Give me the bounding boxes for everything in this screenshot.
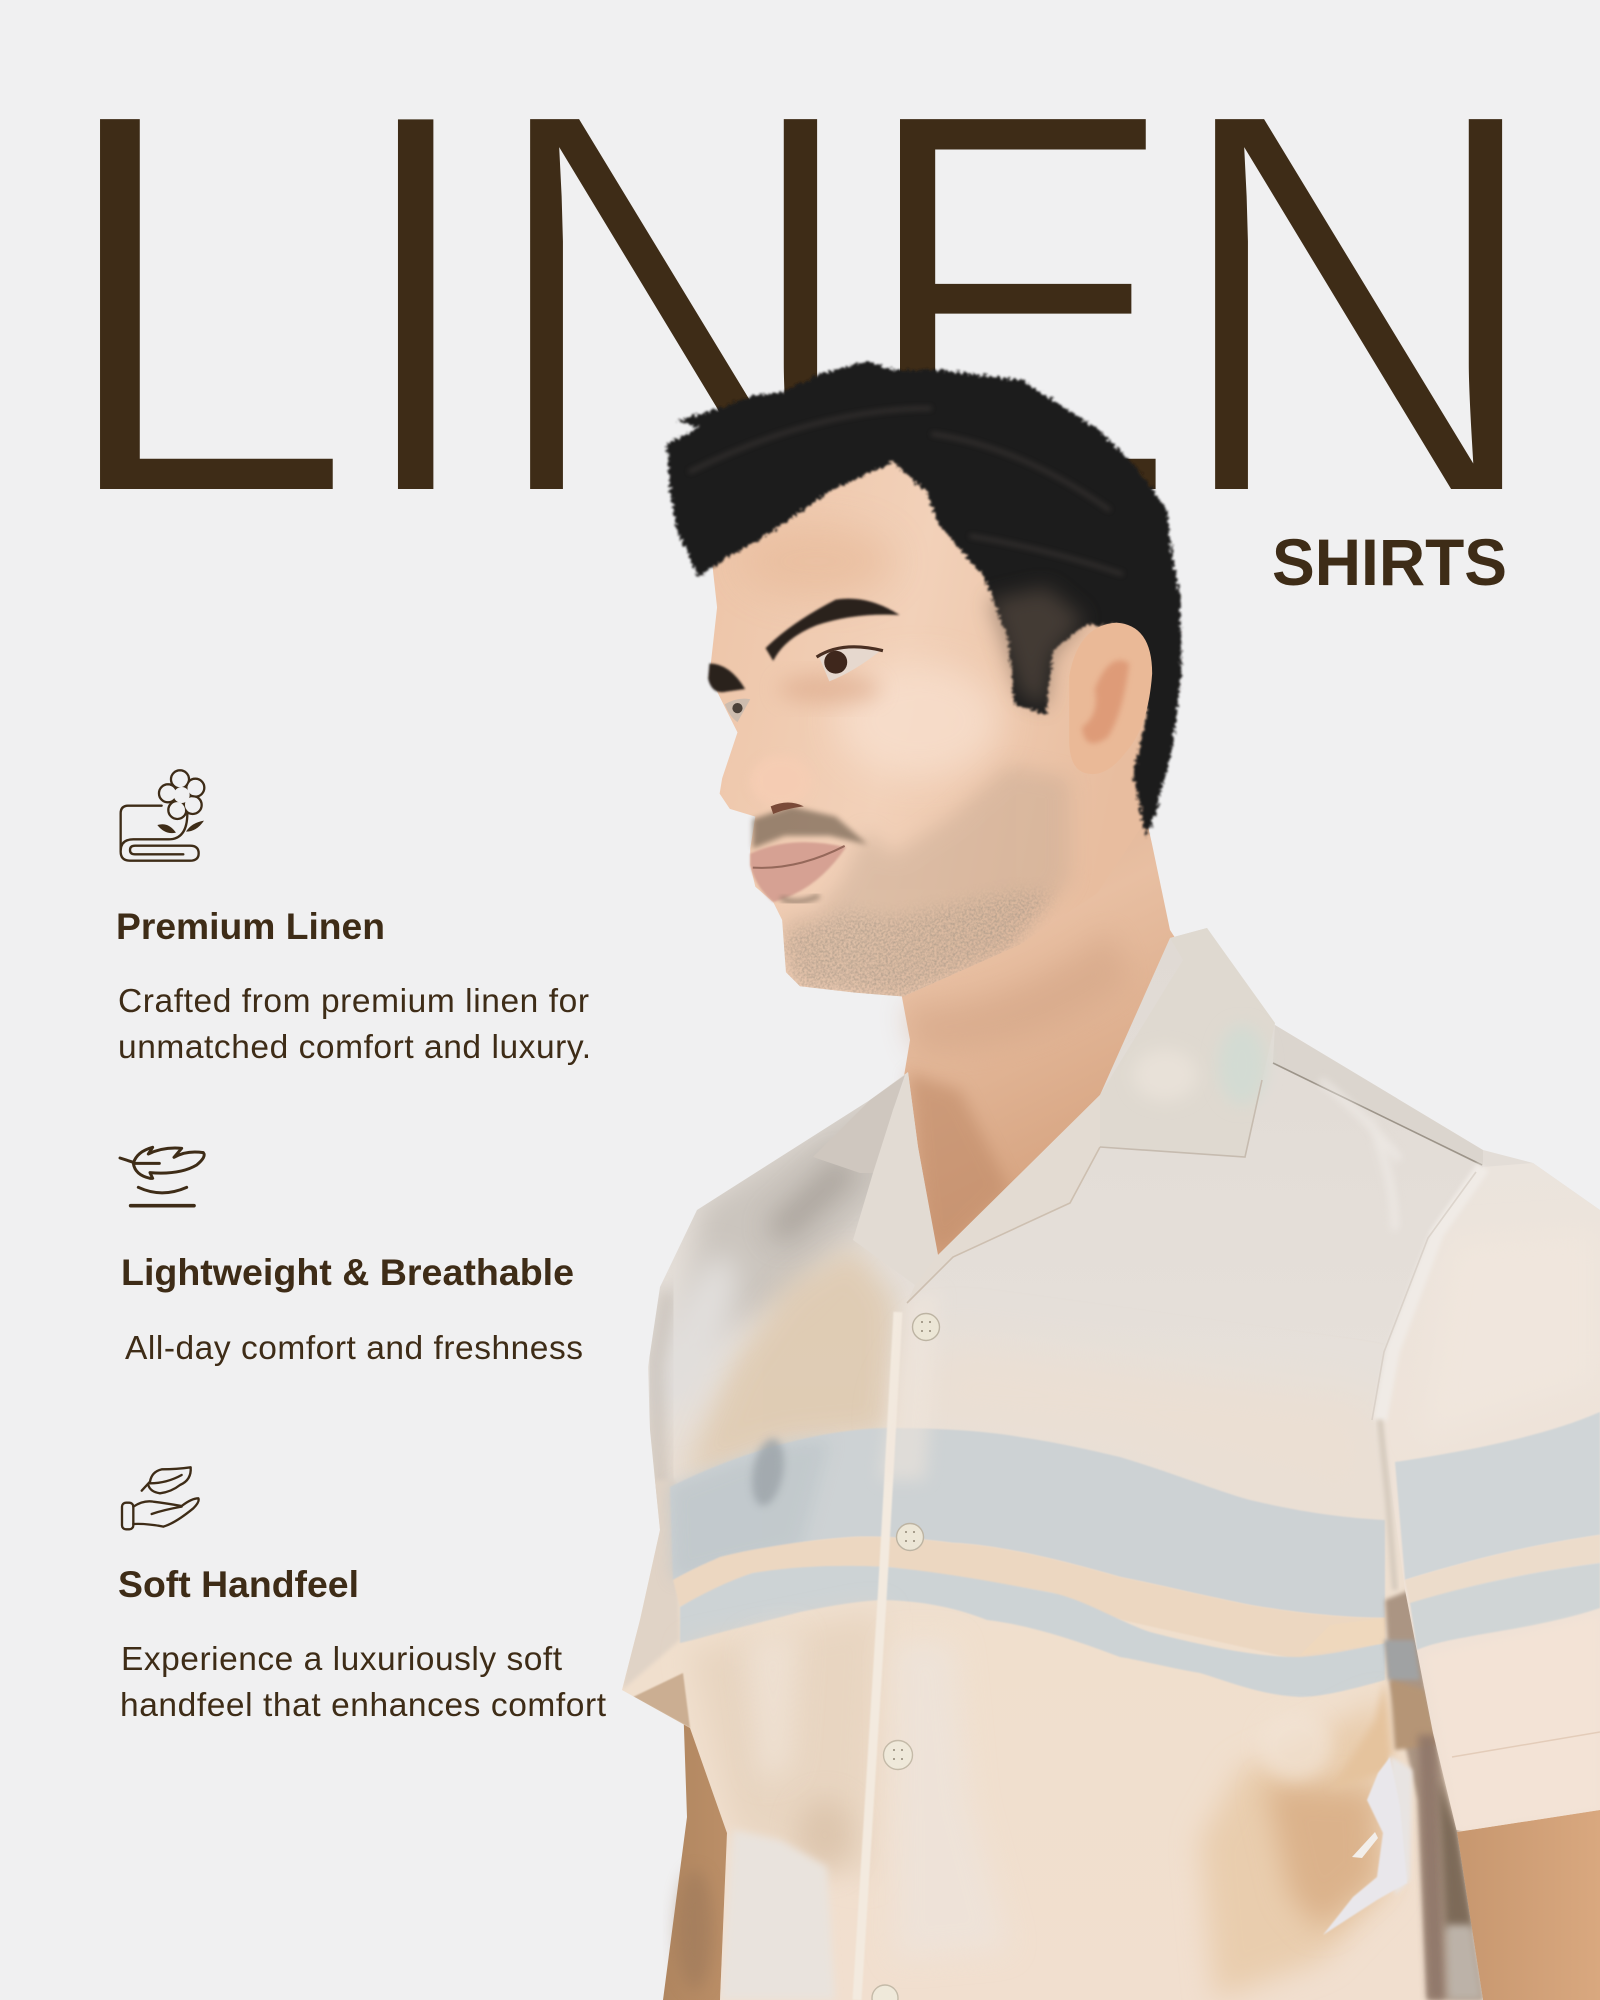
- armhole seam lower: [1380, 1420, 1395, 1590]
- face shading: [740, 526, 1069, 1000]
- chin shadow: [781, 896, 819, 902]
- pale white area near side: [1390, 1755, 1412, 1895]
- hair: [667, 361, 1182, 836]
- sleeve lower pale: [1425, 1615, 1600, 1832]
- right eye: [817, 647, 883, 681]
- head: [667, 361, 1182, 1000]
- right tan dark: [1265, 1785, 1378, 1930]
- placket soft tone: [880, 1290, 940, 1480]
- description: Crafted from premium linen for: [118, 983, 589, 1020]
- cheek highlight: [836, 663, 1002, 778]
- icon: feather: [120, 1147, 204, 1206]
- blue band second: [680, 1566, 1385, 1697]
- placket pale tone: [892, 1640, 1010, 1960]
- placket highlight: [857, 1312, 898, 2000]
- peach stripe: [673, 1537, 1385, 1660]
- lower left tan: [690, 1612, 880, 1880]
- heading: Soft Handfeel: [118, 1564, 359, 1605]
- collar right: [1100, 928, 1275, 1157]
- title: LINEN: [48, 0, 1551, 618]
- side panel pale bottom: [1446, 1925, 1483, 2000]
- pale patch: [1257, 1710, 1333, 1780]
- feature: premium linen: [116, 770, 591, 1066]
- subtitle: SHIRTS: SHIRTS: [1272, 525, 1507, 599]
- nostril: [771, 803, 804, 814]
- armhole seam strip: [1380, 1167, 1483, 1420]
- body folds: [1320, 1080, 1400, 1230]
- sideburn fade: [989, 587, 1085, 708]
- left shoulder grey: [686, 1101, 873, 1328]
- left sleeve underside: [633, 1673, 690, 1728]
- title: LINEN: L: [48, 0, 357, 613]
- description: Experience a luxuriously soft: [121, 1641, 563, 1678]
- yoke: [1273, 1025, 1483, 1167]
- face: [709, 453, 1155, 996]
- body upper tone: [900, 1340, 1380, 1510]
- side panel grey-blue: [1384, 1640, 1420, 1680]
- description: All-day comfort and freshness: [125, 1330, 583, 1367]
- right lapel: [907, 1095, 1100, 1303]
- left dark smudge: [775, 1165, 850, 1235]
- feature: soft handfeel: [118, 1467, 607, 1724]
- side panel mauve strip: [1418, 1735, 1445, 2000]
- title: LINEN: E: [854, 0, 1182, 614]
- lower left highlight: [745, 1630, 800, 1780]
- title: LINEN: N: [1166, 0, 1551, 613]
- forehead tone: [758, 528, 890, 596]
- icon: towel and flower: [121, 770, 204, 861]
- left edge grey: [655, 1290, 668, 1500]
- left eye: [725, 699, 750, 722]
- sleeve peach stripe: [1405, 1535, 1600, 1605]
- band left darker tone: [670, 1440, 830, 1580]
- small white flick: [1352, 1832, 1378, 1858]
- left lapel: [853, 1072, 938, 1285]
- lips: [750, 842, 846, 902]
- bottom-left pale patch: [720, 1830, 835, 2000]
- sleeve band upper: [1395, 1412, 1600, 1580]
- eye socket shade: [778, 674, 880, 704]
- moustache: [753, 806, 868, 848]
- sleeve: [1380, 1150, 1600, 1832]
- left arm: [663, 1650, 740, 2000]
- stubble speckle: [781, 893, 1053, 1000]
- cuff stitch: [1452, 1732, 1600, 1757]
- heading: Lightweight & Breathable: [121, 1252, 574, 1293]
- title: LINEN: I: [338, 0, 494, 618]
- right tan light: [1200, 1700, 1390, 2000]
- sleeve highlight: [1420, 1230, 1600, 1440]
- right arm: [1440, 1790, 1600, 2000]
- dark band smudge: [750, 1436, 786, 1507]
- hair texture: [689, 408, 1123, 574]
- description: [118, 983, 591, 1066]
- right eyebrow: [766, 599, 900, 661]
- side panel dark under arm: [1438, 1780, 1473, 1930]
- side panel dark: [1385, 1590, 1483, 2000]
- sleeve band lower: [1410, 1563, 1600, 1650]
- ear: [1069, 623, 1152, 774]
- blue band main: [670, 1428, 1385, 1618]
- right tan edge: [1330, 1680, 1393, 1790]
- peach patch between stripes: [1300, 1618, 1385, 1655]
- yoke seam: [1273, 1063, 1482, 1165]
- mouth line: [753, 846, 845, 868]
- tan brush: [683, 1245, 895, 1480]
- feature: lightweight and breathable: [120, 1147, 583, 1367]
- buttons: [872, 1314, 940, 2000]
- heading: Premium Linen: [116, 906, 385, 947]
- shirt: [622, 928, 1600, 2000]
- nose shading: [750, 755, 811, 806]
- description: handfeel that enhances comfort: [120, 1687, 607, 1724]
- lower left dark tan: [797, 1799, 853, 1871]
- stubble tint: [781, 766, 1069, 998]
- left eyebrow: [708, 663, 745, 692]
- white brush: [1323, 1757, 1407, 1935]
- left side panel: [622, 1480, 680, 1690]
- side panel brown: [1390, 1680, 1438, 1750]
- lapel stitch: [907, 1147, 1100, 1303]
- icon: hand with leaf: [122, 1467, 199, 1529]
- left collar: [813, 1075, 905, 1173]
- description: unmatched comfort and luxury.: [118, 1029, 591, 1066]
- model photo illustration: [622, 361, 1600, 2000]
- pale left highlight: [678, 1254, 742, 1350]
- title: LINEN: N: [480, 0, 866, 613]
- neck: [895, 790, 1183, 1262]
- description: [120, 1641, 607, 1724]
